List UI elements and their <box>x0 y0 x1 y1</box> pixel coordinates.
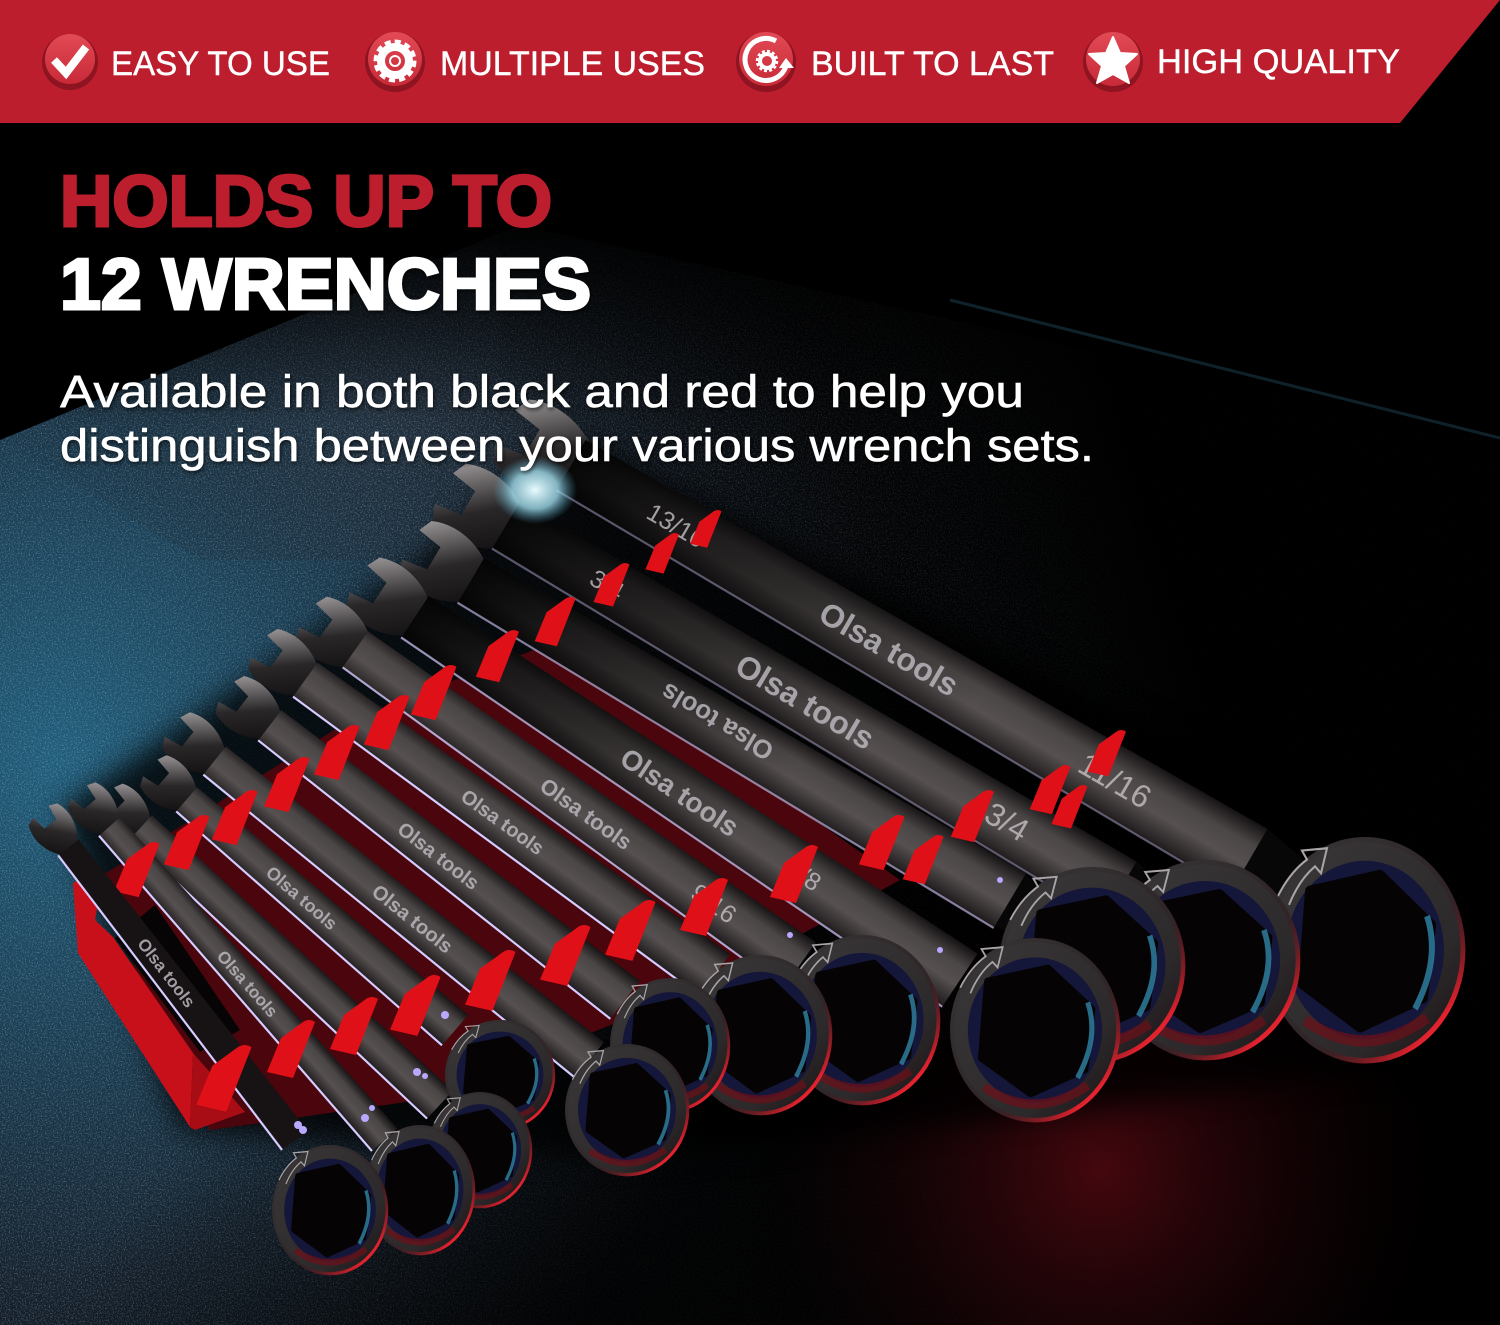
wrench 6 <box>242 623 732 999</box>
wrench 5 <box>289 590 818 990</box>
wrench set and rack <box>24 391 1465 1275</box>
wrench 1 <box>484 391 1327 929</box>
wrench 5: Olsa tools <box>535 773 637 855</box>
ring head 3 <box>999 867 1185 1063</box>
wrench 3 <box>392 513 1074 959</box>
ring head 11 <box>365 1125 475 1255</box>
description text: distinguish between your various wrench sets. <box>60 420 1094 471</box>
wrench 2: 3/4 <box>585 564 629 606</box>
ring head 5 <box>784 935 940 1105</box>
icon: check mark <box>42 34 98 90</box>
label: EASY TO USE <box>111 45 330 83</box>
feature: high quality <box>1083 32 1400 92</box>
ring head 8 <box>565 1044 689 1176</box>
ring head 4 <box>950 938 1120 1122</box>
label: MULTIPLE USES <box>440 45 705 83</box>
label: BUILT TO LAST <box>811 45 1054 83</box>
ring head 1 <box>1265 837 1465 1063</box>
wrench 4 <box>339 550 979 1009</box>
ring head 9 <box>445 1020 555 1130</box>
wrench 7 <box>210 670 642 1021</box>
shadow below wrenches <box>60 430 1460 1160</box>
rack: red side wall <box>73 870 245 1130</box>
red reflection under the shafts <box>95 640 900 1130</box>
banner background <box>0 0 1500 123</box>
wrench 8: Olsa tools <box>367 881 457 958</box>
ring heads, back to front <box>272 837 1465 1275</box>
purple light sparkles on ring necks <box>294 877 1003 1134</box>
title line 2: 12 WRENCHES <box>60 245 591 325</box>
wrench 10 <box>91 779 455 1121</box>
wrench 3: Olsa tools <box>655 677 779 767</box>
ring head 10 <box>428 1092 532 1208</box>
wrench 7: Olsa tools <box>393 818 483 895</box>
icon: gear with circular arrow <box>736 32 796 92</box>
feature: built to last <box>736 32 1054 92</box>
ring head 12 <box>272 1145 388 1275</box>
ring head 2 <box>1110 860 1300 1060</box>
surface edge highlight <box>950 300 1500 438</box>
description text <box>60 366 1094 471</box>
cyan light reflection on top wrench jaw <box>493 456 577 524</box>
wrench 1: 11/16 <box>1072 745 1158 816</box>
wrench 2 <box>424 456 1187 951</box>
rack pegs, front row <box>196 730 1126 1112</box>
wrench 9: Olsa tools <box>262 862 341 934</box>
wrench 1: Olsa tools <box>813 595 965 703</box>
ring head 6 <box>688 955 832 1115</box>
icon: gear <box>365 32 425 92</box>
wrench 12: Olsa tools <box>133 935 199 1011</box>
feature banner <box>0 0 1500 123</box>
feature: multiple uses <box>365 32 705 92</box>
wrench 4: Olsa tools <box>615 742 744 843</box>
wrench 2: 3/4 <box>979 795 1035 849</box>
icon: star <box>1083 32 1143 92</box>
wrench 2: Olsa tools <box>729 647 881 757</box>
wrench 5: 9/16 <box>686 878 741 929</box>
wrench 11 <box>63 778 401 1154</box>
feature: easy to use <box>42 34 330 90</box>
ring head 7 <box>610 978 730 1112</box>
rack pegs, rear row <box>114 510 721 897</box>
title line 1: HOLDS UP TO <box>60 162 552 242</box>
description text: Available in both black and red to help you <box>60 366 1024 417</box>
wrench 12 <box>24 799 311 1153</box>
wrench 1: 13/16 <box>642 498 710 554</box>
wrench 9 <box>135 750 470 1048</box>
wrench 6: Olsa tools <box>456 786 548 860</box>
wrench 4: 5/8 <box>782 855 826 897</box>
wrench 8 <box>156 707 606 1081</box>
label: HIGH QUALITY <box>1157 43 1400 81</box>
wrench 11: Olsa tools <box>213 947 281 1021</box>
